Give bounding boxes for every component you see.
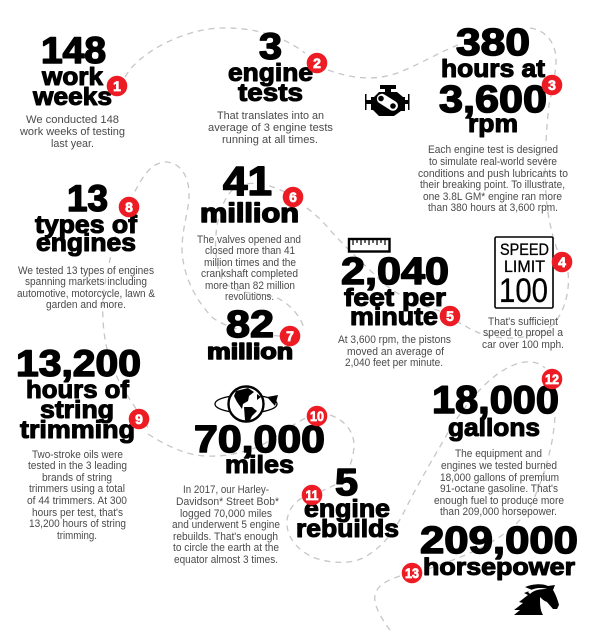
text block: stat 12 description: 18,000 gallons of premium <box>440 472 559 484</box>
heading: 3 engine tests: tests <box>238 79 303 107</box>
heading: 148 work weeks: work <box>41 63 103 91</box>
badge 2 <box>307 53 327 73</box>
text block: stat 6 description: revolutions. <box>225 291 274 303</box>
text block: stat 9 description: brands of string <box>42 472 112 484</box>
text block: stat 8 description: automotive, motorcycle, lawn & <box>17 288 156 300</box>
badge 9 <box>129 409 149 429</box>
text block: stat 8 description: spanning markets including <box>25 276 147 288</box>
heading: 18,000 gallons: 18,000 <box>432 379 559 422</box>
text block: stat 9 description: 13,200 hours of string <box>29 518 126 530</box>
heading: 41 million: 41 <box>223 158 272 204</box>
icon: horse head <box>514 584 559 615</box>
badge 10 <box>307 406 327 426</box>
heading: 13,200 hours of string trimming: 13,200 <box>16 343 141 384</box>
heading: 2,040 feet per minute: feet per <box>344 284 446 312</box>
stat 3: 380 hours at 3,600 rpm <box>418 22 568 214</box>
text block: stat 6 description: crankshaft completed <box>201 268 298 280</box>
text block: stat 3 description: than 380 hours at 3,600 rpm. <box>428 202 558 214</box>
text block: stat 3 description: one 3.8L GM* engine ran more <box>423 191 562 203</box>
stat 6: 41 million <box>197 158 301 303</box>
heading: 13,200 hours of string trimming: hours of <box>26 376 130 404</box>
heading: 13,200 hours of string trimming: trimming <box>20 416 135 444</box>
text block: stat 1 description <box>19 114 125 150</box>
stat 2: 3 engine tests <box>208 26 334 146</box>
badge 11: 11 <box>306 487 319 503</box>
badge 1 <box>107 76 127 96</box>
badge 9: 9 <box>135 411 143 427</box>
badge 2: 2 <box>313 55 321 71</box>
icon: speed limit sign <box>495 237 553 310</box>
badge 5: 5 <box>446 308 454 324</box>
text block: stat 8 description <box>17 265 156 311</box>
text block: stat 9 description: tested in the 3 leading <box>28 460 127 472</box>
badge 11 <box>302 485 322 505</box>
heading: 2,040 feet per minute: 2,040 <box>341 251 449 293</box>
text block: stat 9 description: of 44 trimmers. At 300 <box>27 495 127 507</box>
text block: stat 9 description: Two-stroke oils were <box>32 449 123 461</box>
heading: 380 hours at 3,600 rpm: rpm <box>468 110 518 138</box>
text block: stat 12 description <box>434 448 564 518</box>
text block: stat 3 description: conditions and push lubricants to <box>418 168 568 180</box>
text block: stat 3 description: their breaking point. To illustrate, <box>420 179 565 191</box>
heading: 13,200 hours of string trimming <box>16 343 141 444</box>
text block: stat 5 description: moved an average of <box>347 346 445 358</box>
text block: stat 8 description: We tested 13 types of engines <box>18 265 154 277</box>
heading: stat 13, 209,000 horsepower <box>420 520 578 581</box>
heading: 13,200 hours of string trimming: string <box>40 396 114 424</box>
heading: 18,000 gallons <box>432 379 559 442</box>
heading: stat 13, 209,000 horsepower: 209,000 <box>420 520 578 562</box>
text block: stat 6 description: closed more than 41 <box>205 245 295 257</box>
text block: stat 10 description: logged 70,000 miles <box>180 508 272 520</box>
text block: stat 4 description: That's sufficient <box>488 316 558 328</box>
text block: stat 6 description <box>197 234 301 303</box>
heading: stat 11, 5 engine rebuilds: engine <box>304 495 390 523</box>
icon: ruler <box>349 239 390 252</box>
text block: stat 6 description: The valves opened and <box>197 234 301 246</box>
heading: 2,040 feet per minute: minute <box>350 303 438 331</box>
text block: stat 4 description: car over 100 mph. <box>482 339 564 351</box>
heading: stat 11, 5 engine rebuilds: rebuilds <box>296 515 399 543</box>
heading: 380 hours at 3,600 rpm: hours at <box>441 55 546 83</box>
heading: stat 11, 5 engine rebuilds <box>296 462 399 543</box>
heading: 41 million <box>200 158 299 228</box>
badge 7 <box>280 326 300 346</box>
heading: 70,000 miles: 70,000 <box>194 419 325 461</box>
badge 7: 7 <box>286 328 294 344</box>
heading: 380 hours at 3,600 rpm: 3,600 <box>439 79 547 121</box>
stat 12: 18,000 gallons <box>432 379 564 518</box>
stat 1: 148 work weeks <box>19 30 125 150</box>
text block: stat 3 description: to simulate real-world severe <box>429 156 557 168</box>
heading: 70,000 miles <box>194 419 325 479</box>
stat 9: 13,200 hours of string trimming <box>16 343 141 542</box>
badge 13 <box>402 563 422 583</box>
text block: stat 10 description: In 2017, our Harley- <box>183 484 269 496</box>
icon: speed limit sign: SPEED <box>500 241 549 259</box>
heading: 13 types of engines: types of <box>35 211 138 239</box>
heading: 70,000 miles: miles <box>225 451 294 479</box>
heading: 148 work weeks <box>32 30 112 111</box>
heading: 13 types of engines <box>35 178 138 257</box>
heading: stat 13, 209,000 horsepower: horsepower <box>423 554 575 581</box>
badge 1: 1 <box>113 78 121 94</box>
stat 8: 13 types of engines <box>17 178 156 311</box>
text block: stat 9 description: trimmers using a total <box>29 483 125 495</box>
heading: 148 work weeks: 148 <box>41 30 106 71</box>
heading: stat 7, 82 million <box>207 304 293 364</box>
text block: stat 10 description: rebuilds. That's enough <box>173 531 278 543</box>
text block: stat 5 description: At 3,600 rpm, the pistons <box>338 334 451 346</box>
text block: stat 8 description: garden and more. <box>46 299 126 311</box>
text block: stat 5 description <box>338 334 451 369</box>
heading: 18,000 gallons: gallons <box>448 414 540 442</box>
icon: globe with orbit arrow <box>215 386 278 422</box>
text block: stat 3 description: Each engine test is designed <box>428 144 558 156</box>
heading: 380 hours at 3,600 rpm <box>439 22 547 138</box>
text block: stat 10 description: Davidson* Street Bob* <box>176 496 280 508</box>
text block: stat 2 description: running at all times. <box>222 134 318 146</box>
badge 5 <box>440 306 460 326</box>
heading: 41 million: million <box>200 198 299 228</box>
text block: stat 1 description: last year. <box>51 138 94 150</box>
heading: 13 types of engines: engines <box>36 229 136 257</box>
badge 12 <box>542 369 562 389</box>
text block: stat 12 description: enough fuel to produce more <box>434 495 564 507</box>
badge 12: 12 <box>545 371 559 387</box>
text block: stat 2 description: That translates into an <box>217 110 324 122</box>
badge 8: 8 <box>125 199 133 215</box>
text block: stat 1 description: We conducted 148 <box>26 114 119 126</box>
text block: stat 10 description <box>172 484 280 566</box>
icon: speed limit sign: 100 <box>499 272 548 310</box>
dashed route connecting the numbered stats <box>103 28 568 634</box>
text block: stat 5 description: 2,040 feet per minute. <box>345 357 443 369</box>
text block: stat 12 description: The equipment and <box>455 448 542 460</box>
text block: stat 4 description <box>482 316 564 351</box>
text block: stat 10 description: equator almost 3 times. <box>174 554 278 566</box>
text block: stat 12 description: engines we tested burned <box>441 460 557 472</box>
badge 6 <box>283 187 303 207</box>
text block: stat 9 description: trimming. <box>57 530 97 542</box>
badge 8 <box>119 197 139 217</box>
badge 10: 10 <box>310 408 324 424</box>
stat 5: 2,040 feet per minute <box>338 251 451 369</box>
icon: speed limit sign: LIMIT <box>504 258 545 276</box>
heading: 148 work weeks: weeks <box>32 83 112 111</box>
heading: 3 engine tests: engine <box>228 59 313 87</box>
badge 6: 6 <box>289 189 297 205</box>
text block: stat 1 description: work weeks of testing <box>19 126 125 138</box>
badge 3: 3 <box>548 77 556 93</box>
badge 4: 4 <box>558 254 566 270</box>
stat 10: 70,000 miles <box>172 419 325 566</box>
text block: stat 2 description: average of 3 engine tests <box>208 122 334 134</box>
text block: stat 12 description: than 209,000 horsepower. <box>440 506 557 518</box>
text block: stat 9 description: hours per test, that's <box>32 507 123 519</box>
text block: stat 2 description <box>208 110 334 146</box>
badge 13: 13 <box>405 565 419 581</box>
heading: stat 7, 82 million: million <box>207 339 293 364</box>
badge 4 <box>552 252 572 272</box>
text block: stat 12 description: 91-octane gasoline. That's <box>440 483 558 495</box>
text block: stat 3 description <box>418 144 568 214</box>
text block: stat 10 description: to circle the earth at the <box>173 542 279 554</box>
heading: 380 hours at 3,600 rpm: 380 <box>456 22 530 64</box>
text block: stat 6 description: million times and the <box>204 257 296 269</box>
text block: stat 6 description: more than 82 million <box>205 280 295 292</box>
heading: 3 engine tests: 3 <box>259 26 282 67</box>
badge 3 <box>542 75 562 95</box>
heading: stat 11, 5 engine rebuilds: 5 <box>335 462 358 504</box>
heading: 2,040 feet per minute <box>341 251 449 331</box>
text block: stat 10 description: and underwent 5 engine <box>172 519 280 531</box>
heading: 13 types of engines: 13 <box>67 178 108 219</box>
text block: stat 4 description: speed to propel a <box>483 327 564 339</box>
heading: stat 7, 82 million: 82 <box>226 304 274 346</box>
icon: engine <box>365 85 410 116</box>
text block: stat 9 description <box>27 449 127 542</box>
heading: 3 engine tests <box>228 26 313 107</box>
